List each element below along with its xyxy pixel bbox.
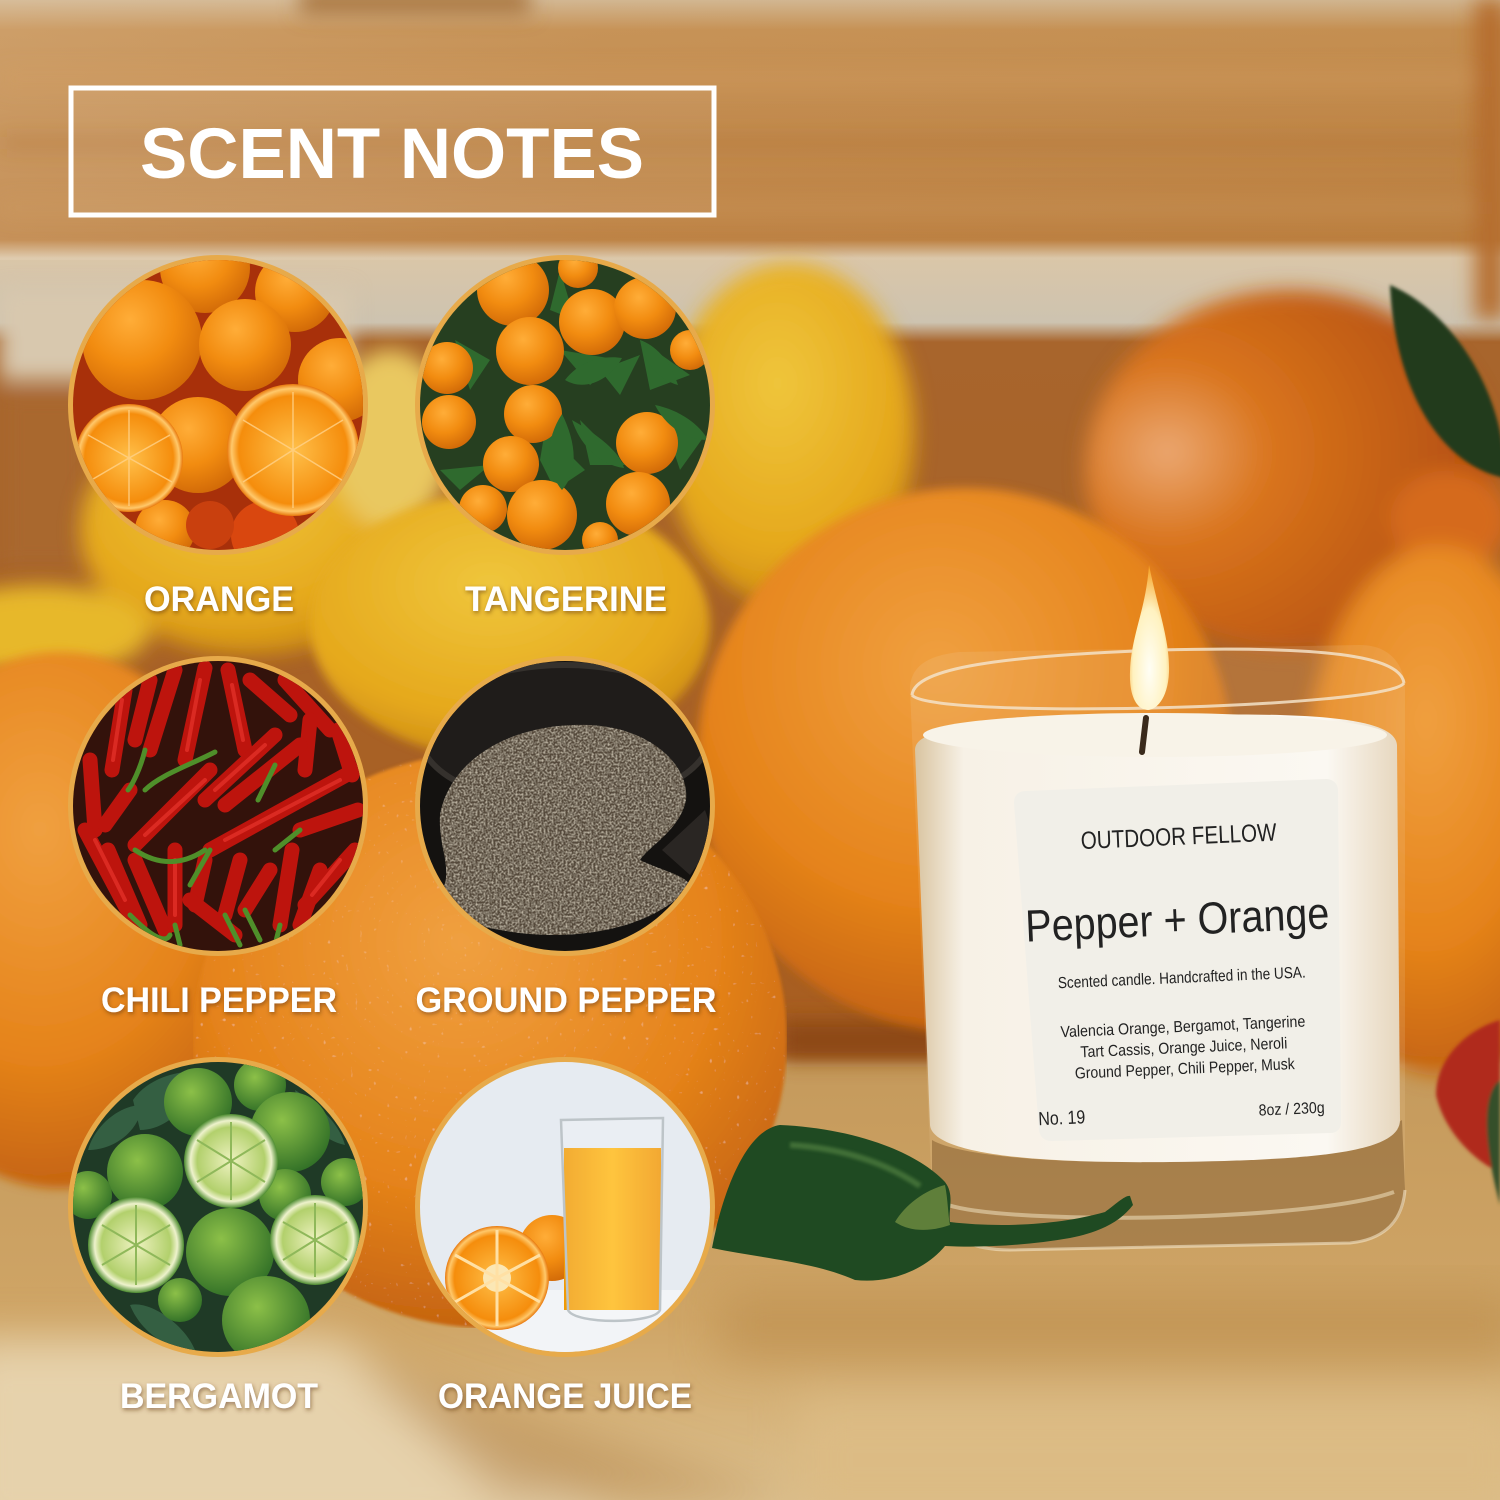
batch number: No. 19: [1038, 1107, 1086, 1130]
background fruit: lemons and oranges: [0, 263, 1500, 1328]
green chili pepper: [712, 1125, 1133, 1281]
label: ground pepper: GROUND PEPPER: [416, 981, 716, 1020]
leaf behind candle: [1390, 285, 1500, 478]
product name: Pepper + Orange: [1024, 887, 1330, 952]
label: orange juice: ORANGE JUICE: [438, 1377, 692, 1416]
red chili pepper at right edge: [1436, 1020, 1500, 1205]
tagline: Scented candle. Handcrafted in the USA.: [1058, 964, 1306, 992]
label: tangerine: TANGERINE: [465, 580, 667, 619]
candle label: [1014, 779, 1341, 1141]
candle flame: [1130, 565, 1169, 710]
note: tangerine: [417, 248, 713, 558]
ingredients: [1060, 1014, 1308, 1083]
weight: 8oz / 230g: [1258, 1100, 1325, 1120]
note: orange: [70, 223, 382, 569]
note: ground pepper: [417, 658, 715, 955]
note: bergamot: [64, 1059, 369, 1364]
candle in glass jar: [910, 565, 1405, 1250]
title box: [71, 88, 714, 215]
label: bergamot: BERGAMOT: [120, 1377, 318, 1416]
note: chili pepper: [70, 658, 366, 955]
brand name: OUTDOOR FELLOW: [1080, 819, 1277, 855]
note: orange juice: [417, 1059, 713, 1360]
ingredients: Tart Cassis, Orange Juice, Neroli: [1080, 1035, 1288, 1061]
title box: SCENT NOTES: [140, 115, 644, 194]
label: chili pepper: CHILI PEPPER: [101, 981, 337, 1020]
ingredients: Ground Pepper, Chili Pepper, Musk: [1075, 1056, 1296, 1083]
label: orange: ORANGE: [144, 580, 294, 619]
ingredients: Valencia Orange, Bergamot, Tangerine: [1060, 1014, 1306, 1041]
